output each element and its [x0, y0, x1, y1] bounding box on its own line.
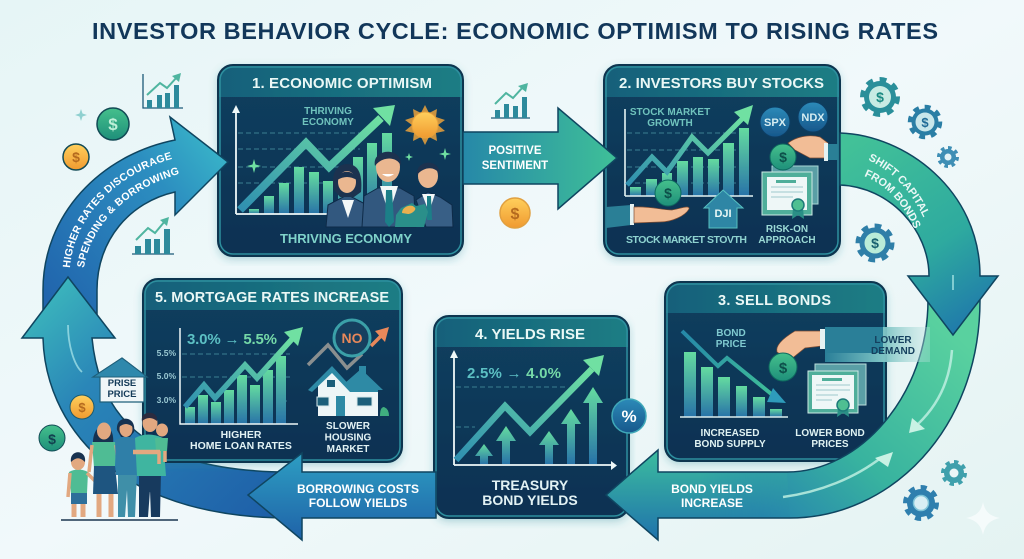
icon: small gear top right	[939, 148, 957, 166]
panel: 5 mortgage rates increase	[143, 279, 402, 462]
caption: risk-on approach: RISK-ON	[766, 224, 808, 235]
label: thriving economy: THRIVING	[304, 106, 352, 117]
icon: green coin top left	[97, 108, 129, 140]
label: stock market growth: GROWTH	[647, 118, 693, 129]
father with baby	[133, 413, 168, 517]
sparkles	[247, 148, 451, 173]
arrow label: BORROWING COSTS	[297, 482, 419, 496]
label: lower demand: DEMAND	[871, 346, 915, 357]
caption: higher home loan rates: HOME LOAN RATES	[190, 440, 292, 452]
icon: gear with coin lower: $	[871, 235, 879, 251]
icon: DJI up arrow	[704, 190, 743, 228]
panel: 4 yields rise	[434, 316, 629, 518]
icon: gear with coin top: $	[876, 89, 884, 105]
hand with coin	[769, 329, 825, 381]
chart: stock market growth	[625, 105, 753, 196]
icon: gold coin lower left: $	[78, 400, 86, 415]
arrow: to bond yields increase	[606, 300, 980, 540]
caption: slower housing market: HOUSING	[325, 432, 372, 444]
arrow: positive sentiment	[463, 108, 617, 209]
panel: 3 sell bonds	[665, 282, 886, 461]
chart: falling bond price	[680, 331, 788, 417]
captions: lower bond prices: LOWER BOND	[795, 428, 865, 439]
arrow label: SENTIMENT	[482, 160, 548, 172]
icon: house	[308, 366, 389, 416]
panel: 1 economic optimism	[218, 65, 463, 256]
heading: 1. ECONOMIC OPTIMISM	[252, 75, 432, 92]
icon: gold coin top left: $	[72, 149, 80, 165]
icon: gold coin centre	[500, 198, 530, 228]
hand with coin: $	[779, 360, 788, 377]
chart: thriving economy	[232, 105, 395, 214]
captions: increased bond supply: BOND SUPPLY	[694, 439, 766, 450]
icon: gear lower right large	[906, 488, 936, 518]
caption: slower housing market: MARKET	[327, 444, 369, 455]
badge: SPX: SPX	[764, 117, 787, 129]
chart: mortgage rates	[180, 327, 303, 424]
icon: mini chart top left	[143, 73, 183, 108]
icon: mini chart lower left	[132, 217, 174, 254]
y axis labels: 5.0%	[157, 371, 176, 381]
sleeve band: lower demand	[769, 327, 930, 381]
icon: green coin top left: $	[108, 115, 118, 134]
icon: gold coin lower left	[70, 395, 94, 419]
icon: gear lower right small	[943, 462, 965, 484]
caption: THRIVING ECONOMY	[280, 231, 412, 246]
caption: risk-on approach: APPROACH	[758, 235, 816, 246]
label: bond price: PRICE	[716, 339, 747, 350]
arrow label: INCREASE	[681, 496, 743, 510]
panel: 2 investors buy stocks	[604, 65, 840, 256]
y axis labels: 5.5%	[157, 348, 176, 358]
icon: sun	[405, 105, 445, 145]
icon: mini chart centre	[491, 83, 530, 118]
label: lower demand: LOWER	[874, 335, 912, 346]
arrow label: FOLLOW YIELDS	[309, 496, 407, 510]
icon: NO with trend: NO	[342, 330, 363, 346]
captions: increased bond supply: INCREASED	[701, 428, 759, 439]
caption: stock market: STOCK MARKET STOVTH	[626, 234, 747, 246]
label: stock market growth: STOCK MARKET	[630, 107, 710, 118]
woman	[115, 419, 140, 517]
values: 2.5% to 4.0%: 2.5% → 4.0%	[467, 365, 561, 382]
values: 3.0% to 5.5%: 3.0% → 5.5%	[187, 331, 277, 348]
badge: NDX	[798, 102, 828, 132]
heading: 4. YIELDS RISE	[475, 326, 585, 343]
icon: gear with coin lower	[858, 226, 892, 260]
heading: 3. SELL BONDS	[718, 293, 831, 309]
icon: open hand with coin: $	[664, 185, 672, 201]
badge: percent	[612, 399, 646, 433]
sparkle white	[966, 502, 1000, 535]
people: business team	[326, 152, 453, 227]
sparkle	[75, 109, 87, 121]
heading: 5. MORTGAGE RATES INCREASE	[155, 290, 389, 306]
arrow label: line one: SHIFT CAPITAL	[869, 154, 928, 218]
icon: green coin lower left	[39, 425, 65, 451]
caption: BOND YIELDS	[482, 492, 578, 508]
icon: certificates	[808, 364, 866, 417]
icon: hand dropping coin	[770, 136, 838, 170]
icon: NO with trend	[308, 320, 389, 368]
icon: price house sign: PRISE	[108, 378, 136, 389]
arrow label: line one: HIGHER RATES DISCOURAGE	[62, 152, 172, 268]
badge: SPX	[760, 107, 790, 137]
mother	[89, 422, 119, 517]
icon: gold coin top left	[63, 144, 89, 170]
caption: higher home loan rates: HIGHER	[221, 429, 261, 441]
child	[68, 452, 96, 517]
badge: NDX: NDX	[801, 112, 825, 124]
icon: price house sign	[93, 358, 147, 402]
heading: 2. INVESTORS BUY STOCKS	[619, 75, 824, 92]
icon: certificate	[762, 166, 818, 219]
arrow: higher rates discourage	[42, 115, 229, 314]
captions: lower bond prices: PRICES	[811, 439, 849, 450]
label: thriving economy: ECONOMY	[302, 117, 354, 128]
icon: open hand with coin	[606, 180, 689, 228]
icon: gold coin centre: $	[511, 206, 520, 223]
icon: hand dropping coin: $	[779, 149, 787, 165]
caption: TREASURY	[492, 477, 568, 493]
label: bond price: BOND	[716, 328, 746, 339]
icon: green coin lower left: $	[48, 431, 56, 447]
icon: dollar coin top right: $	[921, 115, 929, 130]
icon: price house sign: PRICE	[107, 389, 137, 400]
caption: slower housing market: SLOWER	[326, 421, 370, 432]
arrow label: line two: FROM BONDS	[864, 169, 920, 228]
arrow: up to higher rates	[22, 277, 290, 518]
title: INVESTOR BEHAVIOR CYCLE: ECONOMIC OPTIMISM TO RISING RATES	[92, 18, 938, 44]
arrow label: POSITIVE	[488, 145, 542, 157]
icon: gear with coin top	[862, 80, 898, 114]
badge: percent: %	[621, 407, 637, 426]
arrow: borrowing costs follow yields	[248, 453, 436, 540]
arrow: shift capital from bonds	[840, 132, 1000, 336]
y axis labels: 3.0%	[157, 395, 176, 405]
icon: dollar coin top right	[910, 107, 940, 137]
icon: DJI up arrow: DJI	[714, 208, 732, 220]
chart: treasury yields	[450, 350, 617, 470]
arrow label: line two: SPENDING & BORROWING	[77, 168, 179, 268]
arrow label: BOND YIELDS	[671, 482, 753, 496]
icon: family	[61, 413, 178, 520]
